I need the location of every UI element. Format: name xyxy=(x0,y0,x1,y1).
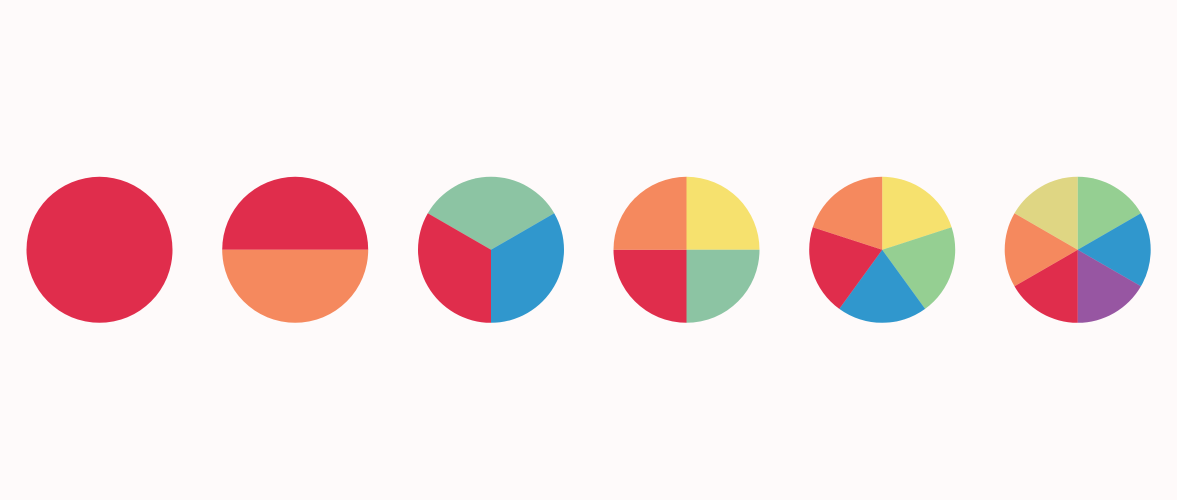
pie: three thirds xyxy=(418,177,564,323)
pie: five fifths xyxy=(809,177,955,323)
pie: two halves xyxy=(222,177,368,323)
pie: four quarters xyxy=(614,177,760,323)
pie: six sixths xyxy=(1005,177,1151,323)
pie: one whole xyxy=(26,177,172,323)
